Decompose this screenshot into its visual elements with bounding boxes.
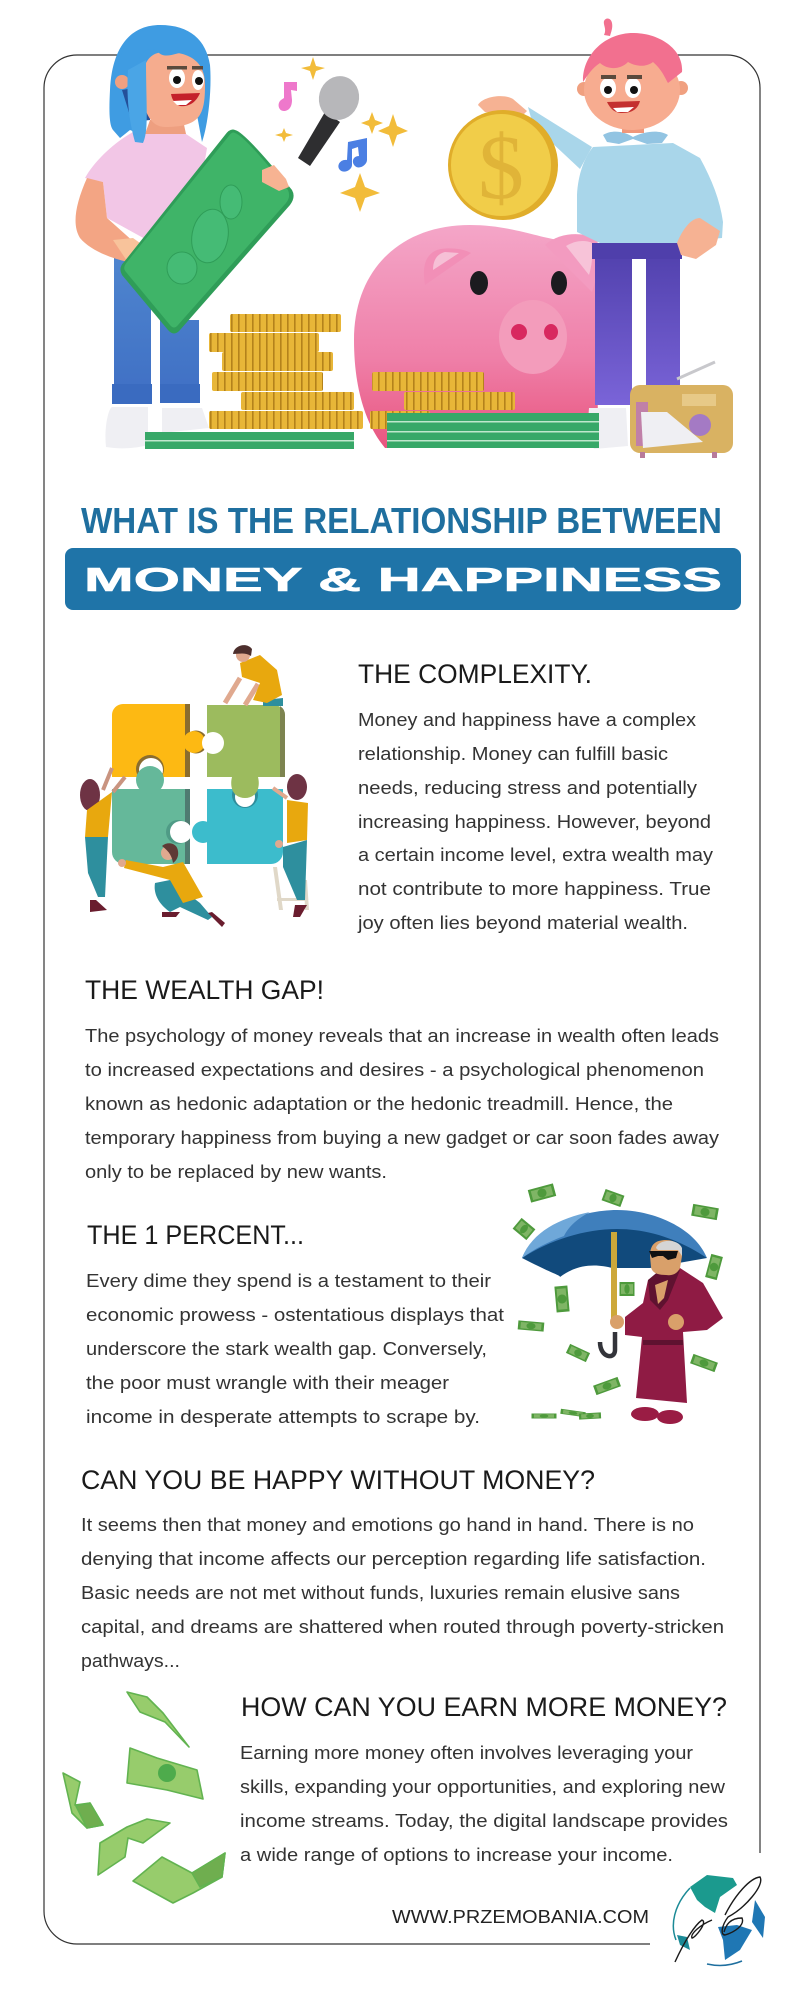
section: the 1 percent: underscore the stark wealth gap. Conversely, <box>86 1338 487 1359</box>
section: the complexity: THE COMPLEXITY. <box>358 659 592 689</box>
boy with pink hair <box>478 19 723 449</box>
section: how can you earn more money: HOW CAN YOU EARN MORE MONEY? <box>241 1692 727 1722</box>
section: the complexity: joy often lies beyond material wealth. <box>357 912 688 933</box>
kneeling man <box>118 843 225 927</box>
section: the 1 percent: the poor must wrangle with their meager <box>86 1372 449 1393</box>
section: the wealth gap <box>85 975 720 1182</box>
hero illustration: people, piggy bank and money <box>76 19 733 458</box>
section: the 1 percent <box>86 1220 504 1427</box>
section: the complexity: increasing happiness. However, beyond <box>358 811 711 832</box>
section: can you be happy without money: Basic needs are not met without funds, luxuries remain elusive sans <box>81 1582 680 1603</box>
umbrella man illustration with falling money <box>513 1183 723 1424</box>
website url: WWW.PRZEMOBANIA.COM <box>392 1906 649 1927</box>
section: how can you earn more money: income streams. Today, the digital landscape provides <box>240 1810 728 1831</box>
woman on right <box>273 774 309 917</box>
section: how can you earn more money: Earning more money often involves leveraging your <box>240 1742 693 1763</box>
logo: globe with signature <box>673 1875 765 1965</box>
section: the wealth gap: to increased expectations and desires - a psychological phenomenon <box>85 1059 704 1080</box>
microphone <box>298 72 364 166</box>
section: the complexity <box>357 659 714 933</box>
section: can you be happy without money: CAN YOU BE HAPPY WITHOUT MONEY? <box>81 1465 595 1495</box>
section: the complexity: not contribute to more happiness. True <box>358 878 711 899</box>
section: the complexity: relationship. Money can fulfill basic <box>358 743 668 764</box>
falling banknotes <box>513 1183 723 1420</box>
section: the 1 percent: income in desperate attempts to scrape by. <box>86 1406 480 1427</box>
puzzle pieces <box>112 704 285 864</box>
radio <box>630 362 733 458</box>
umbrella <box>522 1210 707 1356</box>
girl with blue hair <box>76 25 211 448</box>
section: the wealth gap: The psychology of money reveals that an increase in wealth often leads <box>85 1025 719 1046</box>
title banner: MONEY & HAPPINESS <box>84 561 722 598</box>
title: WHAT IS THE RELATIONSHIP BETWEEN <box>81 500 722 541</box>
woman on left <box>80 768 125 912</box>
section: can you be happy without money: capital, and dreams are shattered when routed through poverty-stricken <box>81 1616 724 1637</box>
gold dollar coin: $ <box>478 116 524 218</box>
section: the wealth gap: THE WEALTH GAP! <box>85 975 324 1005</box>
title <box>65 500 741 610</box>
section: the complexity: needs, reducing stress and potentially <box>358 777 698 798</box>
green banknote held by girl <box>120 130 294 334</box>
piggy bank <box>354 225 598 448</box>
puzzle team illustration <box>80 645 309 927</box>
section: can you be happy without money: denying that income affects our perception regarding life satisfaction. <box>81 1548 706 1569</box>
section: the 1 percent: Every dime they spend is a testament to their <box>86 1270 491 1291</box>
title banner <box>65 548 741 610</box>
section: how can you earn more money: a wide range of options to increase your income. <box>240 1844 673 1865</box>
stacks of green banknotes <box>145 413 599 449</box>
section: the complexity: a certain income level, extra wealth may <box>358 844 714 865</box>
sparkles <box>275 57 408 212</box>
man on top <box>225 645 283 706</box>
section: can you be happy without money: pathways... <box>81 1650 180 1671</box>
section: can you be happy without money: It seems then that money and emotions go hand in hand. There is no <box>81 1514 694 1535</box>
section: the wealth gap: only to be replaced by new wants. <box>85 1161 387 1182</box>
gold dollar coin <box>448 110 558 220</box>
man in red robe <box>610 1240 723 1424</box>
flying green banknotes illustration <box>63 1692 225 1903</box>
section: the 1 percent: economic prowess - ostentatious displays that <box>86 1304 504 1325</box>
stacks of gold coins <box>209 314 515 429</box>
music notes <box>279 82 367 172</box>
section: the wealth gap: known as hedonic adaptation or the hedonic treadmill. Hence, the <box>85 1093 673 1114</box>
section: can you be happy without money <box>81 1465 724 1671</box>
section: how can you earn more money: skills, expanding your opportunities, and exploring new <box>240 1776 726 1797</box>
section: the wealth gap: temporary happiness from buying a new gadget or car soon fades away <box>85 1127 720 1148</box>
section: the complexity: Money and happiness have a complex <box>358 709 697 730</box>
section: the 1 percent: THE 1 PERCENT... <box>87 1220 304 1250</box>
section: how can you earn more money <box>240 1692 728 1865</box>
